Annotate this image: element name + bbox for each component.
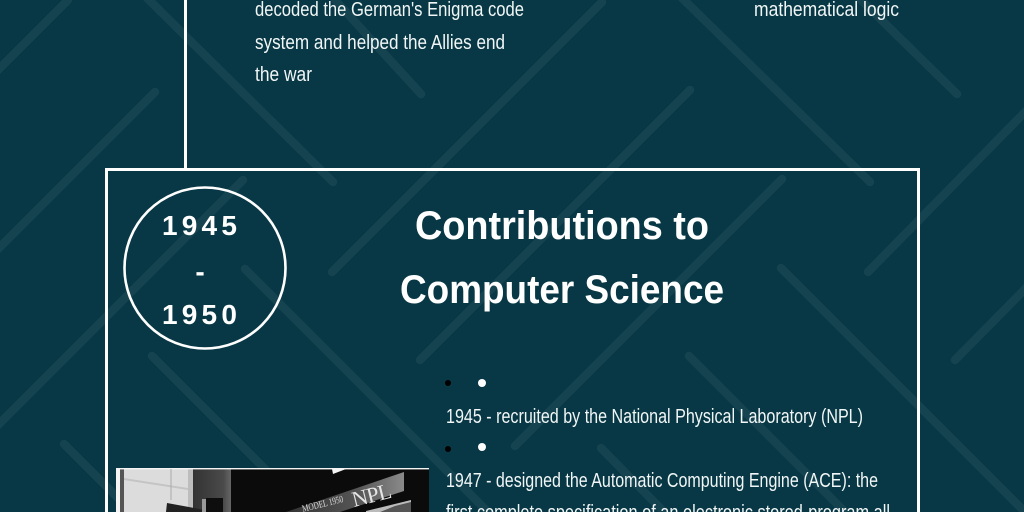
photo: NPL ACE computer [116, 468, 429, 512]
connector line [184, 0, 187, 170]
date badge: 1945-1950: - [195, 256, 205, 287]
bullet list [445, 379, 890, 512]
heading [400, 204, 724, 312]
text block: Enigma: system and helped the Allies end [255, 32, 505, 54]
heading: Computer Science [400, 268, 724, 312]
bullet list: 1947 - designed the Automatic Computing Engine (ACE): the [446, 470, 878, 492]
bullet list: 1945 - recruited by the National Physical Laboratory (NPL) [446, 406, 863, 428]
panel: contributions to computer science [106, 170, 918, 512]
heading: Contributions to [415, 204, 709, 248]
text block: Enigma [255, 0, 524, 86]
text block: Enigma: the war [255, 64, 312, 86]
date badge: 1945-1950: 1945 [162, 210, 241, 241]
photo: NPL ACE computer: NPL [349, 478, 394, 512]
date badge: 1945-1950 [124, 188, 286, 348]
date badge: 1945-1950: 1950 [162, 299, 241, 330]
